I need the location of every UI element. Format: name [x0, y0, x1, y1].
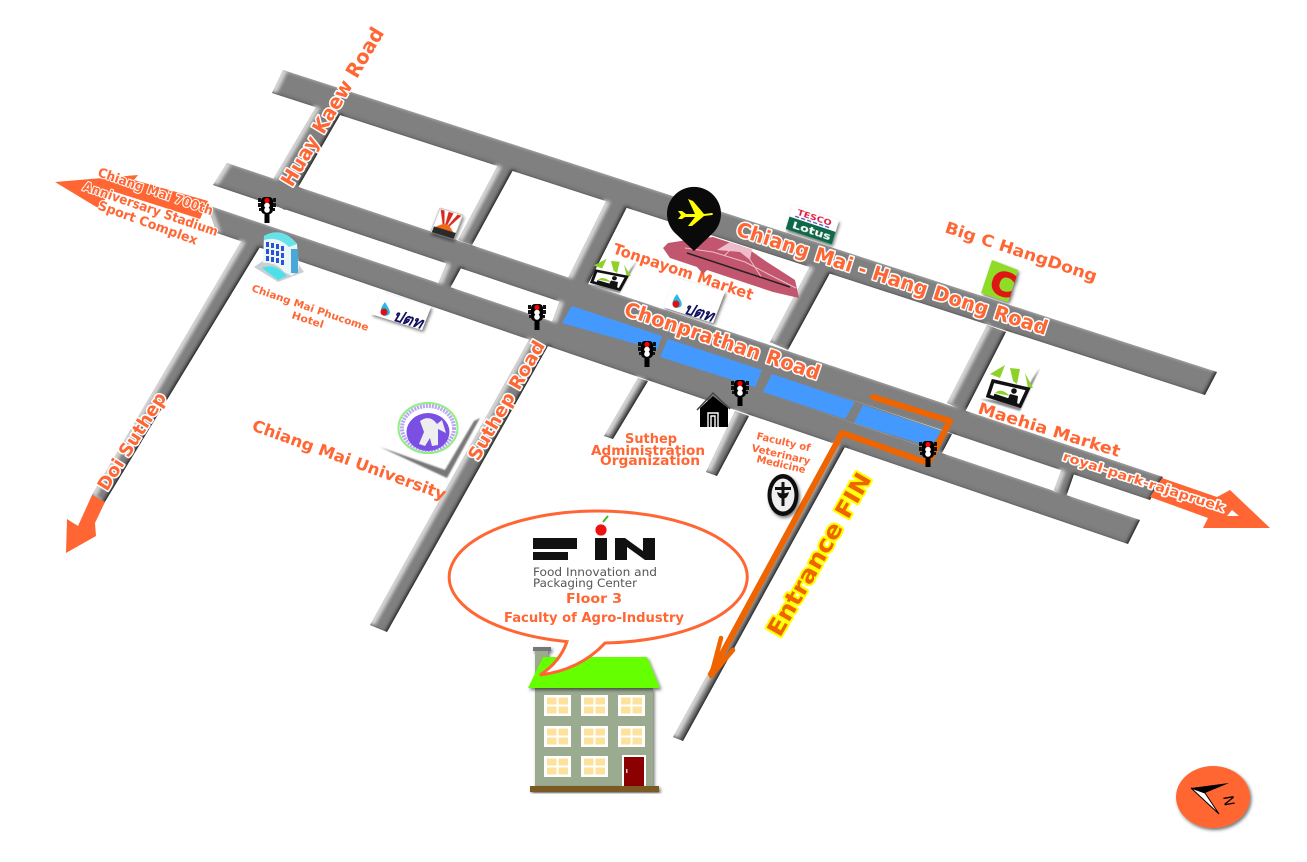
road: entrance lane — [673, 438, 846, 741]
icon: traffic lights — [258, 197, 937, 467]
label: Maehia Market: Maehia Market — [976, 399, 1123, 461]
road: central street — [770, 266, 830, 350]
icon: Maehia market stall — [980, 365, 1040, 411]
arrow: to Doi Suthep — [66, 495, 105, 553]
road network — [92, 70, 1217, 741]
road: Administration lane — [604, 378, 648, 439]
icon: north compass: N — [1221, 794, 1239, 807]
label: stadium destination: Sport Complex — [96, 199, 200, 249]
icon: PTT station west: ปตท — [390, 307, 429, 332]
road: small connector east — [1054, 468, 1074, 497]
label: Suthep Administration Organization: Organization — [600, 454, 700, 469]
road: Maehia street — [947, 325, 1006, 412]
door — [622, 755, 646, 787]
label: Doi Suthep: Doi Suthep — [93, 389, 171, 495]
icon: red market logo — [431, 208, 463, 239]
FIN full name — [533, 565, 657, 590]
label: Faculty of Veterinary Medicine: Veterinary — [750, 443, 812, 468]
road: Chonprathan upper carriageway — [213, 163, 1163, 500]
road: side street north — [458, 163, 513, 245]
label: Entrance FIN: Entrance FIN — [763, 469, 877, 641]
label: Chiang Mai Phucome Hotel: Hotel — [290, 310, 325, 331]
callout: FIN speech bubble — [449, 511, 747, 675]
label: Chiang Mai University: Chiang Mai University — [250, 416, 449, 504]
roof — [528, 657, 660, 688]
road: Huay Kaew Road — [262, 100, 343, 210]
icon: airport map pin — [667, 187, 721, 251]
icon: Tonpayom market stall — [585, 259, 637, 293]
label: Big C HangDong: Big C HangDong — [943, 218, 1100, 286]
label: Chiang Mai Phucome Hotel: Chiang Mai Phucome — [250, 283, 370, 334]
icon: Chiang Mai University seal — [380, 403, 480, 478]
icon: PTT station east — [663, 278, 725, 325]
road: Chiang Mai - Hang Dong Road — [272, 70, 1217, 395]
road: Tonpayom street — [567, 195, 628, 290]
icon: bubble tail overlay on roof — [540, 642, 605, 675]
label: Faculty of Veterinary Medicine: Faculty of — [755, 431, 812, 454]
base — [530, 786, 659, 792]
label: stadium destination: Chiang Mai 700th — [96, 166, 215, 219]
label: Tonpayom Market: Tonpayom Market — [611, 240, 756, 304]
label: Faculty of Veterinary Medicine — [750, 431, 812, 476]
floor text: Floor 3 — [566, 592, 622, 607]
icon: Tesco Lotus: Lotus — [791, 219, 832, 243]
FIN full name: Packaging Center — [533, 576, 637, 590]
chimney — [533, 647, 551, 673]
label: stadium destination: Anniversary Stadium — [81, 180, 220, 240]
icon: hotel building — [254, 232, 304, 282]
road: small connector west — [438, 262, 461, 292]
label: Suthep Administration Organization: Suthep — [625, 432, 677, 447]
icon: Suthep office house — [697, 393, 730, 427]
label: Suthep Road: Suthep Road — [464, 337, 550, 464]
icon: Veterinary seal — [768, 474, 798, 516]
orange route to FIN — [711, 397, 950, 676]
walls — [535, 688, 653, 786]
road: Chonprathan lower carriageway — [207, 205, 1140, 544]
label: Chonprathan Road: Chonprathan Road — [621, 297, 823, 385]
icon: Tesco Lotus: TESCO — [796, 207, 833, 228]
FIN logo — [533, 516, 655, 560]
icon: Tesco Lotus — [786, 205, 839, 244]
icon: PTT station west — [371, 292, 431, 332]
faculty text: Faculty of Agro-Industry — [504, 611, 685, 626]
icon: airport site — [663, 237, 799, 298]
label: Suthep Administration Organization: Administration — [591, 444, 705, 459]
road: Veterinary lane — [706, 411, 749, 476]
arrow: to stadium — [55, 175, 208, 219]
icon: north compass — [1176, 766, 1250, 828]
windows — [544, 695, 645, 777]
icon: PTT station east: ปตท — [681, 300, 720, 325]
arrow: to Royal Park Rajapruek — [1150, 478, 1270, 528]
road: Doi Suthep — [92, 240, 260, 505]
icon: Big C: C — [986, 262, 1020, 306]
label: Suthep Administration Organization — [591, 432, 705, 469]
label: royal-park-rajapruek: royal-park-rajapruek — [1061, 449, 1227, 515]
icon: FIN building — [528, 647, 660, 792]
label: Chiang Mai - Hang Dong Road: Chiang Mai - Hang Dong Road — [733, 217, 1051, 340]
FIN full name: Food Innovation and — [533, 565, 657, 579]
blue median blocks — [562, 306, 941, 447]
label: Huay Kaew Road: Huay Kaew Road — [276, 23, 389, 191]
label: Faculty of Veterinary Medicine: Medicine — [755, 454, 807, 476]
road: Suthep Road — [370, 338, 548, 632]
road: carriageway junction fill — [552, 300, 952, 453]
